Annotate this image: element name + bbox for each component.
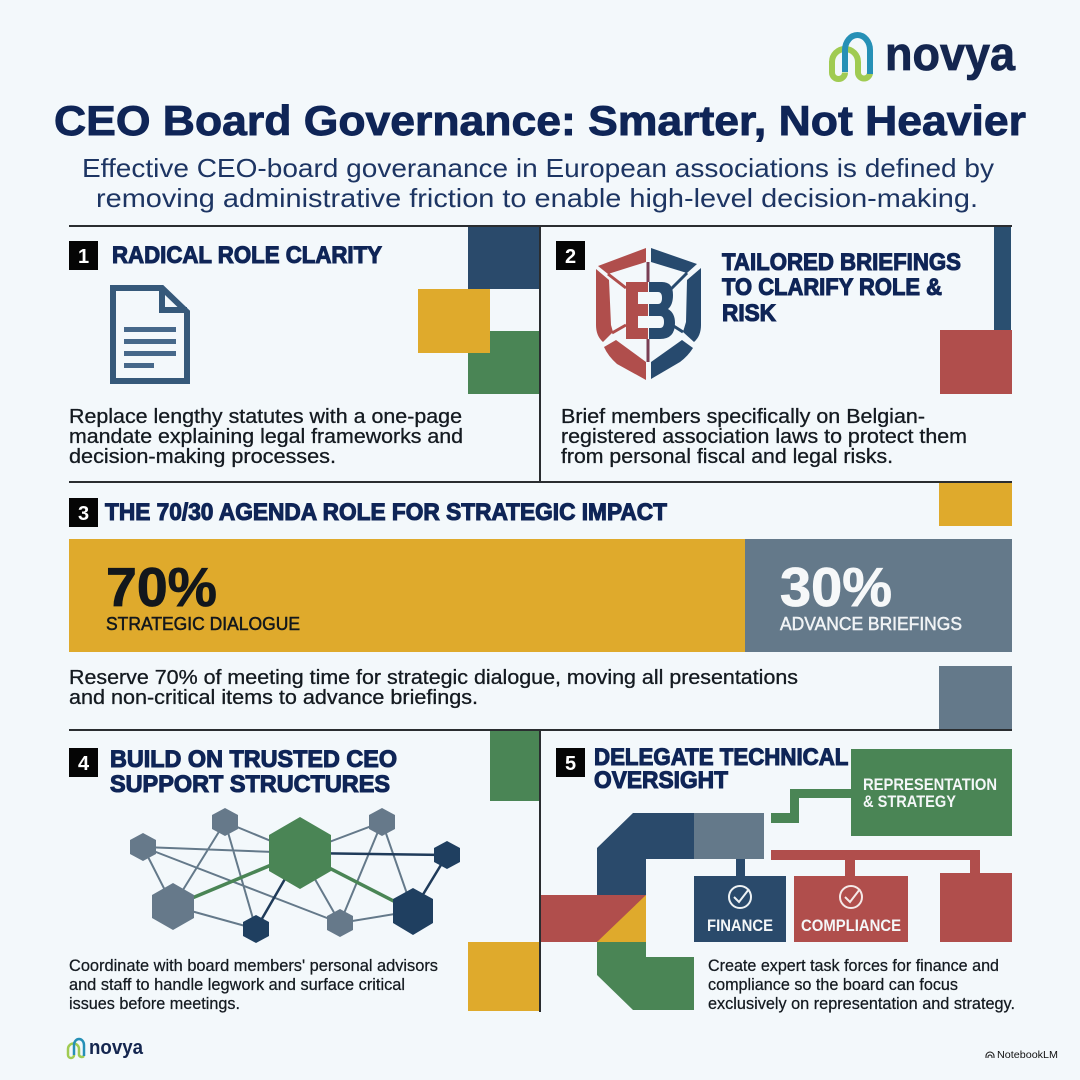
panel 4 body text: issues before meetings. (69, 994, 240, 1013)
footer logo: novya: novya (89, 1037, 144, 1059)
panel 1 body text: decision-making processes. (69, 446, 336, 468)
finance box: FINANCE (707, 916, 773, 935)
panel 1 decorative blocks (418, 227, 539, 394)
compliance box (794, 876, 908, 942)
red connector tree (771, 850, 980, 876)
title: CEO Board Governance: Smarter, Not Heavier (54, 97, 1026, 144)
network diagram (130, 808, 460, 943)
badge 3 (69, 498, 98, 527)
badge 3: 3 (78, 503, 89, 525)
heading 5: DELEGATE TECHNICAL (594, 744, 848, 771)
panel 5 body text: exclusively on representation and strategy. (708, 994, 1015, 1013)
geometric pipe shape (541, 813, 764, 1010)
heading 3: THE 70/30 AGENDA ROLE FOR STRATEGIC IMPACT (105, 499, 667, 526)
representation and strategy box (771, 749, 1012, 836)
compliance box: COMPLIANCE (801, 916, 901, 935)
panel 2 body text: Brief members specifically on Belgian- (561, 406, 925, 428)
panel 4 decorative blocks (468, 731, 539, 1011)
representation and strategy box: REPRESENTATION (863, 775, 997, 794)
footer logo: novya (68, 1037, 144, 1059)
representation and strategy box: & STRATEGY (863, 792, 957, 811)
bar segment: 70% strategic dialogue: STRATEGIC DIALOGUE (106, 614, 300, 634)
heading 2: TAILORED BRIEFINGS (722, 249, 961, 276)
finance box (694, 876, 786, 942)
panel 1 body text: mandate explaining legal frameworks and (69, 426, 463, 448)
badge 2: 2 (565, 246, 576, 268)
panel 4 body text: and staff to handle legwork and surface critical (69, 975, 405, 994)
panel 4 body text: Coordinate with board members' personal advisors (69, 956, 438, 975)
heading 2: TO CLARIFY ROLE & (722, 274, 942, 301)
panel 1 body text: Replace lengthy statutes with a one-page (69, 406, 462, 428)
bar segment: 70% strategic dialogue (69, 539, 745, 652)
heading 5: OVERSIGHT (594, 767, 728, 794)
panel 2: tailored briefings (556, 227, 1012, 468)
navy connector (736, 859, 745, 876)
panel 4: trusted CEO support structures (69, 731, 539, 1013)
bar segment: 30% advance briefings: ADVANCE BRIEFINGS (780, 614, 962, 634)
panel 5 body text: compliance so the board can focus (708, 975, 958, 994)
panel 2 body text: from personal fiscal and legal risks. (561, 446, 893, 468)
heading 2: RISK (722, 300, 777, 327)
logo: novya top right: novya (885, 27, 1016, 80)
subtitle: Effective CEO-board goveranance in European associations is defined by (82, 153, 994, 183)
subtitle: removing administrative friction to enable high-level decision-making. (96, 183, 978, 213)
panel 5: delegate technical oversight (541, 744, 1015, 1013)
panel 3 decorative blocks (939, 483, 1012, 729)
panel 5 body text: Create expert task forces for finance and (708, 956, 999, 975)
bar segment: 30% advance briefings (745, 539, 1012, 652)
badge 1 (69, 241, 98, 270)
badge 4 (69, 748, 98, 777)
panel 2 decorative blocks (940, 227, 1012, 394)
panel 3: 70/30 agenda (69, 483, 1012, 729)
icon: shield with B (596, 248, 701, 380)
badge 4: 4 (78, 753, 90, 775)
badge 1: 1 (78, 246, 89, 268)
logo: novya top right (832, 27, 1016, 80)
panel 3 body text: and non-critical items to advance briefings. (69, 687, 478, 709)
panel 3 body text: Reserve 70% of meeting time for strategic dialogue, moving all presentations (69, 667, 798, 689)
panel 2 body text: registered association laws to protect them (561, 426, 967, 448)
heading 1: RADICAL ROLE CLARITY (112, 242, 382, 269)
heading 4: BUILD ON TRUSTED CEO (110, 746, 397, 773)
footer credit: NotebookLM: NotebookLM (997, 1050, 1058, 1061)
panel 1: radical role clarity (69, 227, 539, 468)
badge 5 (556, 748, 585, 777)
stacked bar: 70 / 30 (69, 539, 1012, 652)
icon: document (113, 288, 187, 381)
bar segment: 30% advance briefings: 30% (780, 556, 892, 618)
heading 4: SUPPORT STRUCTURES (110, 771, 390, 798)
bar segment: 70% strategic dialogue: 70% (106, 556, 217, 618)
badge 2 (556, 241, 585, 270)
empty red box (940, 873, 1012, 942)
badge 5: 5 (565, 753, 576, 775)
